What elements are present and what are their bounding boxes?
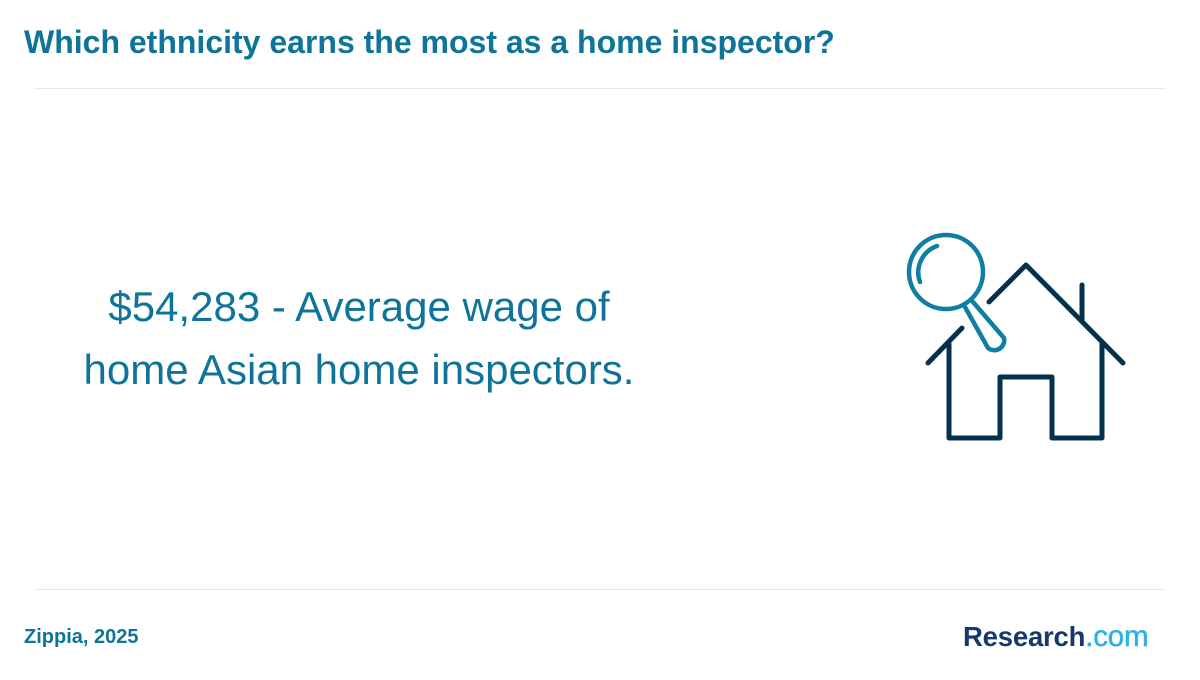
main statement xyxy=(84,283,634,393)
main statement: home Asian home inspectors. xyxy=(84,346,634,393)
logo: Research.com: Research.com xyxy=(963,620,1148,653)
icon: magnifying glass xyxy=(909,235,1004,350)
title: Which ethnicity earns the most as a home inspector? xyxy=(24,24,835,60)
source label: Zippia, 2025 xyxy=(24,626,138,648)
main statement: $54,283 - Average wage of xyxy=(108,283,610,330)
icon: house xyxy=(928,265,1123,438)
icon: house with magnifying glass xyxy=(906,232,1126,440)
